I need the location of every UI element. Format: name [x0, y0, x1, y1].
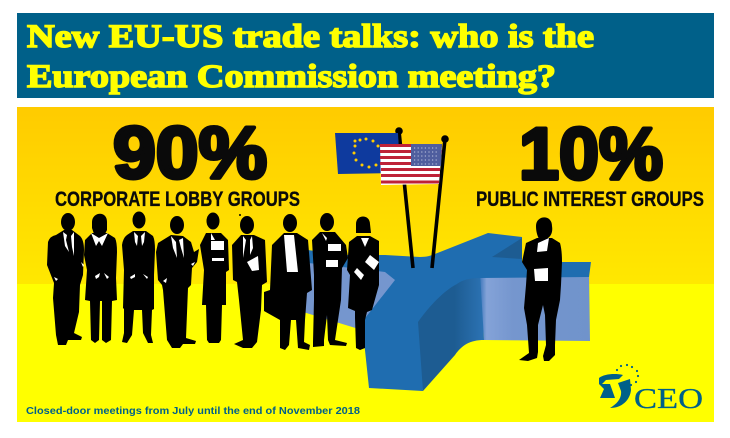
- label: corporate lobby groups: CORPORATE LOBBY GROUPS: [55, 188, 300, 211]
- source note: Closed-door meetings from July until the end of November 2018: [26, 405, 360, 417]
- flag: US: [380, 144, 442, 185]
- title line 2: European Commission meeting?: [27, 59, 556, 95]
- lobbyist 5: [200, 212, 229, 343]
- 90 percent statistic: 90%: [113, 113, 267, 194]
- flagpole: US: [432, 135, 449, 268]
- logo: masks: [599, 374, 623, 398]
- title banner: [17, 13, 714, 98]
- lobbyist 7 with briefcase: [264, 214, 312, 350]
- flag: EU: [335, 133, 400, 174]
- public interest representative: [519, 217, 562, 361]
- logo: star arc: [616, 364, 639, 386]
- lobbyist 2: [84, 214, 117, 343]
- yellow scene panel: [17, 107, 714, 422]
- lobbyist 9: [347, 216, 379, 350]
- lobbyist 8: [312, 213, 348, 347]
- CEO logo: [599, 364, 703, 415]
- 10 percent statistic: 10%: [519, 114, 663, 195]
- lobbyist 6: [232, 214, 267, 348]
- logo: wordmark: CEO: [634, 383, 703, 415]
- title line 1: New EU-US trade talks: who is the: [27, 19, 594, 55]
- lobbyist 1: [47, 213, 84, 345]
- group of nine corporate lobbyists: [47, 212, 379, 350]
- blue star-shaped table: [290, 233, 591, 391]
- lobbyist 3: [122, 212, 155, 343]
- flagpole: EU: [395, 127, 413, 268]
- lobbyist 4: [156, 216, 199, 348]
